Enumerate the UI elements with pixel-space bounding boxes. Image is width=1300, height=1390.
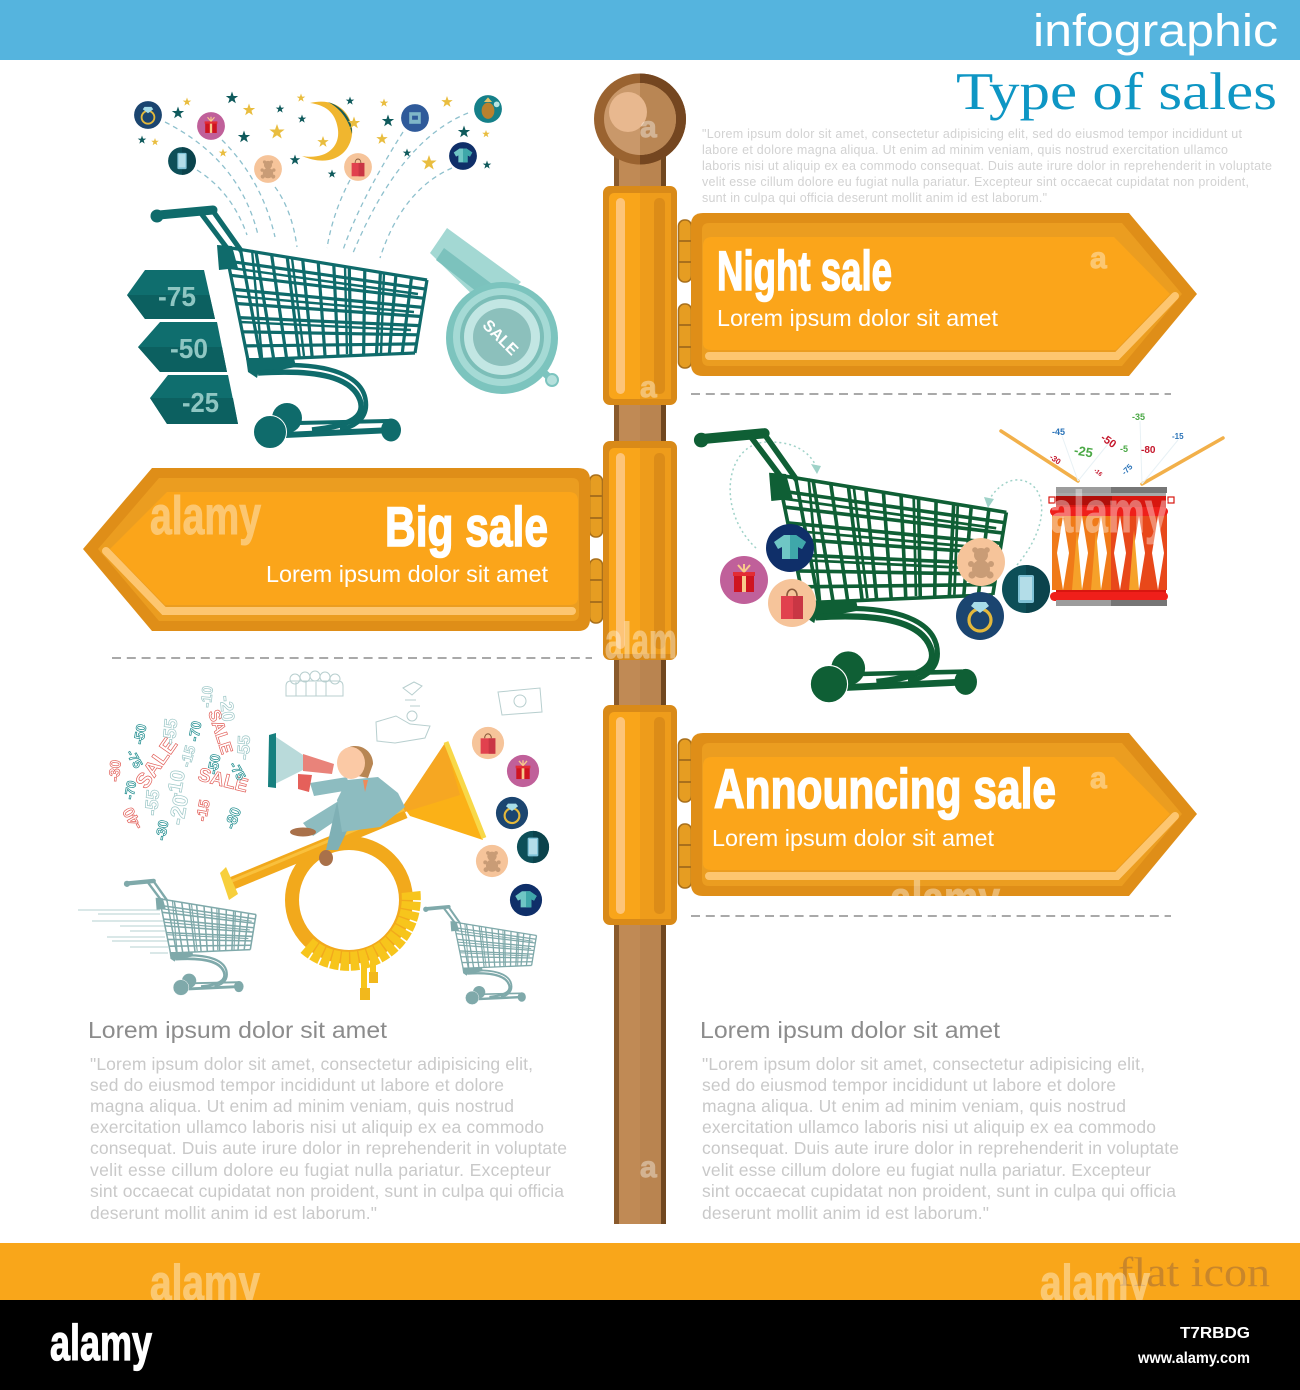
scattered discount numbers: -40 [120, 804, 146, 832]
watermarks: alamy [150, 1255, 260, 1311]
pole knob [594, 74, 686, 164]
text block: right column: velit esse cillum dolore eu fugiat nulla pariatur. Excepteur [702, 1160, 1151, 1180]
text block: intro paragraph: sunt in culpa qui officia deserunt mollit anim id est laborum." [702, 191, 1047, 205]
scattered discount numbers: -70 [185, 720, 205, 743]
illustration: big sale cart and drum [694, 412, 1223, 703]
discount numbers [1048, 412, 1184, 484]
text block: left column [88, 1017, 567, 1223]
hinges [590, 475, 602, 623]
scattered discount numbers: -15 [193, 798, 214, 823]
watermarks: alamy [150, 486, 261, 546]
watermarks: alam [605, 613, 677, 669]
scattered discount numbers: -70 [121, 779, 139, 801]
price tags [127, 270, 238, 424]
scattered discount numbers: -30 [106, 759, 125, 782]
heading: Night sale [717, 239, 892, 302]
price tags: -75 [158, 281, 196, 312]
discount numbers: -25 [1073, 442, 1094, 460]
footer logo: alamy [50, 1315, 152, 1371]
price tags: -50 [170, 333, 208, 364]
text block: right column [700, 1017, 1179, 1223]
banner label: infographic: infographic [1033, 5, 1278, 56]
whistle: SALE [479, 317, 521, 359]
product icons [134, 95, 502, 183]
text block: right column: sed do eiusmod tempor incididunt ut labore et dolore [702, 1075, 1116, 1095]
text block: left column: "Lorem ipsum dolor sit amet, consectetur adipisicing elit, [90, 1054, 533, 1074]
signpost pole [594, 74, 686, 1224]
text block: right column: consequat. Duis aute irure dolor in reprehenderit in voluptate [702, 1138, 1179, 1158]
footer url: www.alamy.com [1137, 1350, 1250, 1367]
watermarks: alamy [1050, 480, 1168, 545]
heading: Announcing sale [714, 757, 1056, 820]
scattered discount numbers: -80 [222, 805, 245, 831]
text block: left column: deserunt mollit anim id est laborum." [90, 1203, 377, 1223]
line sketches [286, 671, 542, 743]
footer image id: T7RBDG [1180, 1325, 1250, 1342]
product icons [472, 727, 549, 916]
shopping cart [694, 433, 1006, 703]
bottom banner [0, 1243, 1300, 1300]
text block: intro paragraph: labore et dolore magna aliqua. Ut enim ad minim veniam, quis nostrud exercitation ullamco [702, 143, 1228, 157]
scattered discount numbers: -15 [177, 744, 199, 769]
scattered discount numbers: -30 [152, 819, 172, 842]
price tags: -25 [182, 387, 219, 418]
top banner [0, 0, 1300, 60]
sign: Announcing sale [678, 733, 1197, 896]
scattered discount numbers: -50 [130, 723, 150, 746]
subheading: Lorem ipsum dolor sit amet [717, 305, 999, 331]
text block: left column: sint occaecat cupidatat non proident, sunt in culpa qui officia [90, 1181, 564, 1201]
scattered discount numbers: -55 [159, 718, 181, 745]
text block: right column: sint occaecat cupidatat non proident, sunt in culpa qui officia [702, 1181, 1176, 1201]
illustration: night sale [127, 92, 558, 448]
man with megaphone [268, 733, 405, 866]
watermarks: alamy [1040, 1255, 1150, 1311]
dashed trails [165, 113, 468, 258]
product icons [720, 524, 1050, 640]
watermarks: alamy [890, 872, 1000, 924]
discount numbers: -35 [1132, 412, 1145, 422]
scattered discount numbers: -55 [141, 789, 163, 816]
whistle [430, 228, 558, 394]
illustration: announcing sale [78, 671, 549, 1005]
drum sticks [1001, 431, 1223, 484]
discount numbers: -15 [1172, 432, 1184, 441]
text block: right column: magna aliqua. Ut enim ad minim veniam, quis nostrud [702, 1096, 1126, 1116]
scattered discount numbers: -75 [226, 759, 249, 783]
banner label: flat icon: flat icon [1118, 1249, 1270, 1295]
scattered discount numbers: -20 [165, 793, 193, 827]
subheading: Lorem ipsum dolor sit amet [266, 561, 549, 587]
discount numbers: -30 [1048, 452, 1063, 467]
text block: right column: exercitation ullamco laboris nisi ut aliquip ex ea commodo [702, 1117, 1156, 1137]
discount numbers: -5 [1120, 444, 1128, 454]
scattered discount numbers: -75 [123, 747, 146, 771]
discount numbers: -50 [1098, 432, 1118, 451]
text block: left column: Lorem ipsum dolor sit amet [88, 1017, 387, 1043]
moon [302, 102, 352, 161]
scattered discount numbers: SALE [196, 764, 250, 797]
text block: right column: "Lorem ipsum dolor sit amet, consectetur adipisicing elit, [702, 1054, 1145, 1074]
dotted arrows [730, 442, 1042, 565]
speed lines [78, 910, 168, 953]
hinges [678, 220, 692, 368]
title: Type of sales [956, 63, 1277, 121]
shopping cart [150, 210, 427, 448]
watermarks: a [640, 371, 657, 404]
text block: intro paragraph: laboris nisi ut aliquip ex ea commodo consequat. Duis aute irure dolor in reprehenderit in voluptate [702, 159, 1272, 173]
scattered discount numbers: -50 [204, 753, 224, 776]
text block: left column: sed do eiusmod tempor incididunt ut labore et dolore [90, 1075, 504, 1095]
watermarks: a [1090, 762, 1107, 795]
subheading: Lorem ipsum dolor sit amet [712, 825, 995, 851]
text block: left column: magna aliqua. Ut enim ad minim veniam, quis nostrud [90, 1096, 514, 1116]
scattered discount numbers: -10 [198, 685, 217, 708]
discount numbers: -75 [1120, 462, 1135, 477]
text block: left column: exercitation ullamco laboris nisi ut aliquip ex ea commodo [90, 1117, 544, 1137]
discount numbers: -16 [1092, 468, 1103, 478]
scattered discount numbers: -10 [163, 769, 190, 801]
stars [138, 92, 491, 178]
sign: Big sale [83, 468, 602, 631]
watermarks: a [640, 111, 657, 144]
text block: intro paragraph: velit esse cillum dolore eu fugiat nulla pariatur. Excepteur sint occaecat cupidatat non proident, [702, 175, 1249, 189]
discount numbers: -45 [1052, 427, 1065, 437]
watermarks [150, 111, 1168, 1311]
text block: right column: deserunt mollit anim id est laborum." [702, 1203, 989, 1223]
scattered discount numbers [106, 685, 254, 842]
footer bar [0, 1300, 1300, 1390]
text block: left column: consequat. Duis aute irure dolor in reprehenderit in voluptate [90, 1138, 567, 1158]
heading: Big sale [385, 495, 548, 558]
watermarks: a [640, 1151, 657, 1184]
text block: intro paragraph: "Lorem ipsum dolor sit amet, consectetur adipisicing elit, sed do eiusmod tempor incididunt ut [702, 127, 1243, 141]
scattered discount numbers: -55 [234, 735, 254, 760]
hinges [678, 739, 692, 888]
drum [1049, 487, 1174, 606]
text block: intro paragraph [702, 127, 1272, 205]
pole sleeves [603, 186, 677, 925]
watermarks: a [1090, 242, 1107, 275]
horn [220, 742, 484, 1000]
sign: Night sale [678, 213, 1197, 376]
small carts [124, 881, 537, 1005]
discount numbers: -80 [1141, 445, 1156, 456]
text block: left column: velit esse cillum dolore eu fugiat nulla pariatur. Excepteur [90, 1160, 551, 1180]
scattered discount numbers: -20 [216, 695, 238, 722]
scattered discount numbers: SALE [131, 734, 182, 793]
scattered discount numbers: SALE [204, 707, 236, 756]
text block: right column: Lorem ipsum dolor sit amet [700, 1017, 1000, 1043]
